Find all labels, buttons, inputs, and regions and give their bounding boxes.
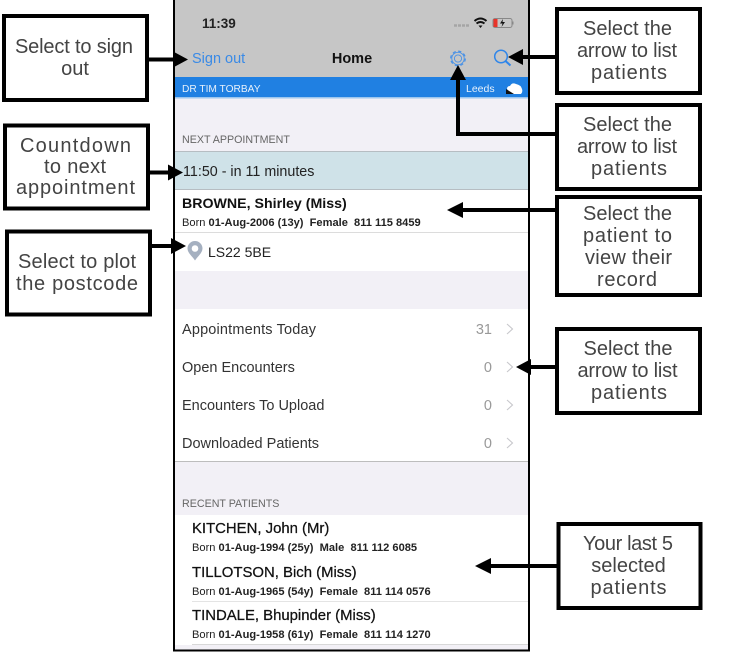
patient: Kitchen: KITCHEN, John (Mr): [192, 521, 329, 537]
callout: settings arrow: [557, 105, 700, 189]
callout: view patient record: [557, 197, 700, 295]
callout: settings arrow: arrow to list: [577, 136, 677, 158]
patient: Tindale: TINDALE, Bhupinder (Miss): [192, 608, 376, 624]
next patient row: [175, 190, 528, 271]
list row: downloaded patients: [182, 436, 512, 452]
countdown bar: 11:50 - in 11 minutes: [183, 164, 314, 180]
list row: downloaded patients: 0: [484, 436, 492, 452]
sign out link: Sign out: [192, 51, 245, 67]
status and navigation bar: 11:39: [202, 16, 236, 31]
callout: countdown: Countdown: [20, 135, 131, 157]
list row: encounters to upload: 0: [484, 398, 492, 414]
callout: recent patients: selected: [591, 555, 666, 577]
callout: sign out: out: [61, 58, 89, 80]
callout: recent patients: [558, 524, 700, 608]
recent patients heading: RECENT PATIENTS: [182, 498, 279, 510]
patient: Tindale: Born 01-Aug-1958 (61y) Female 811 114 1270: [192, 629, 431, 641]
callout: view patient record: patient to: [583, 225, 672, 247]
callout: search arrow: patients: [591, 62, 667, 84]
status and navigation bar: Home: [332, 51, 372, 67]
list row: appointments today: [182, 322, 512, 338]
patient: Kitchen: Born 01-Aug-1994 (25y) Male 811 112 6085: [192, 542, 417, 554]
arrow: to sign out: [148, 52, 188, 66]
arrow: to patient row: [447, 202, 556, 218]
callout: countdown: [5, 126, 148, 208]
list row: encounters to upload: [182, 398, 512, 414]
callout: plot postcode: [7, 232, 150, 314]
patient: Tillotson: TILLOTSON, Bich (Miss): [192, 565, 357, 581]
icon: settings gear: [451, 51, 465, 66]
arrow: to settings icon: [450, 65, 556, 136]
callout: countdown: to next: [44, 156, 106, 178]
arrow: to postcode pin: [151, 238, 186, 254]
icon: search: [495, 50, 510, 66]
callout: view patient record: view their: [585, 247, 672, 269]
user banner: Leeds: [466, 83, 495, 95]
patient: Tindale: [192, 608, 431, 641]
countdown bar: [175, 151, 528, 190]
next patient row: LS22 5BE: [208, 244, 271, 260]
user banner: [175, 77, 528, 98]
arrow: to recent patients: [475, 558, 558, 574]
summary list: [175, 309, 528, 462]
user banner: DR TIM TORBAY: [182, 84, 261, 95]
callout: plot postcode: the postcode: [16, 273, 138, 295]
callout: sign out: Select to sign: [15, 36, 133, 58]
phone frame: [174, 0, 529, 650]
callout: view patient record: Select the: [583, 203, 672, 225]
callout: countdown: appointment: [16, 177, 135, 199]
phone screen: [174, 0, 529, 651]
callout: open encounters arrow: patients: [591, 382, 667, 404]
callout: plot postcode: Select to plot: [18, 251, 136, 273]
patient: Tillotson: [192, 565, 431, 598]
list row: appointments today: Appointments Today: [182, 322, 317, 338]
status icons: [454, 18, 514, 28]
list row: open encounters: [182, 360, 512, 376]
callout: recent patients: Your last 5: [583, 533, 673, 555]
icon: map pin: [188, 241, 202, 260]
recent patients list: [175, 515, 528, 645]
callout: search arrow: Select the: [583, 18, 672, 40]
arrow: to open encounters: [516, 359, 557, 375]
callout: settings arrow: Select the: [583, 114, 672, 136]
patient: Kitchen: [192, 521, 417, 554]
callout: recent patients: patients: [590, 577, 666, 599]
callout: open encounters arrow: [557, 329, 700, 413]
list row: open encounters: Open Encounters: [182, 360, 295, 376]
next patient row: BROWNE, Shirley (Miss): [182, 196, 347, 212]
next patient row: Born 01-Aug-2006 (13y) Female 811 115 8459: [182, 217, 421, 229]
callout: view patient record: record: [597, 269, 657, 291]
icon: weather cloud: [506, 83, 522, 94]
callout: search arrow: [557, 9, 700, 93]
next appointment heading: NEXT APPOINTMENT: [182, 134, 290, 146]
callout: sign out: [4, 16, 147, 100]
callout: open encounters arrow: Select the: [584, 338, 672, 360]
status and navigation bar: [175, 0, 528, 77]
callout: settings arrow: patients: [591, 158, 667, 180]
patient: Tillotson: Born 01-Aug-1965 (54y) Female 811 114 0576: [192, 586, 431, 598]
list row: open encounters: 0: [484, 360, 492, 376]
arrow: to countdown: [149, 164, 183, 180]
callout: open encounters arrow: arrow to list: [578, 360, 678, 382]
arrow: to search icon: [508, 49, 556, 65]
list row: encounters to upload: Encounters To Upload: [182, 398, 324, 414]
callout: search arrow: arrow to list: [577, 40, 677, 62]
list row: appointments today: 31: [476, 322, 492, 338]
list row: downloaded patients: Downloaded Patients: [182, 436, 319, 452]
